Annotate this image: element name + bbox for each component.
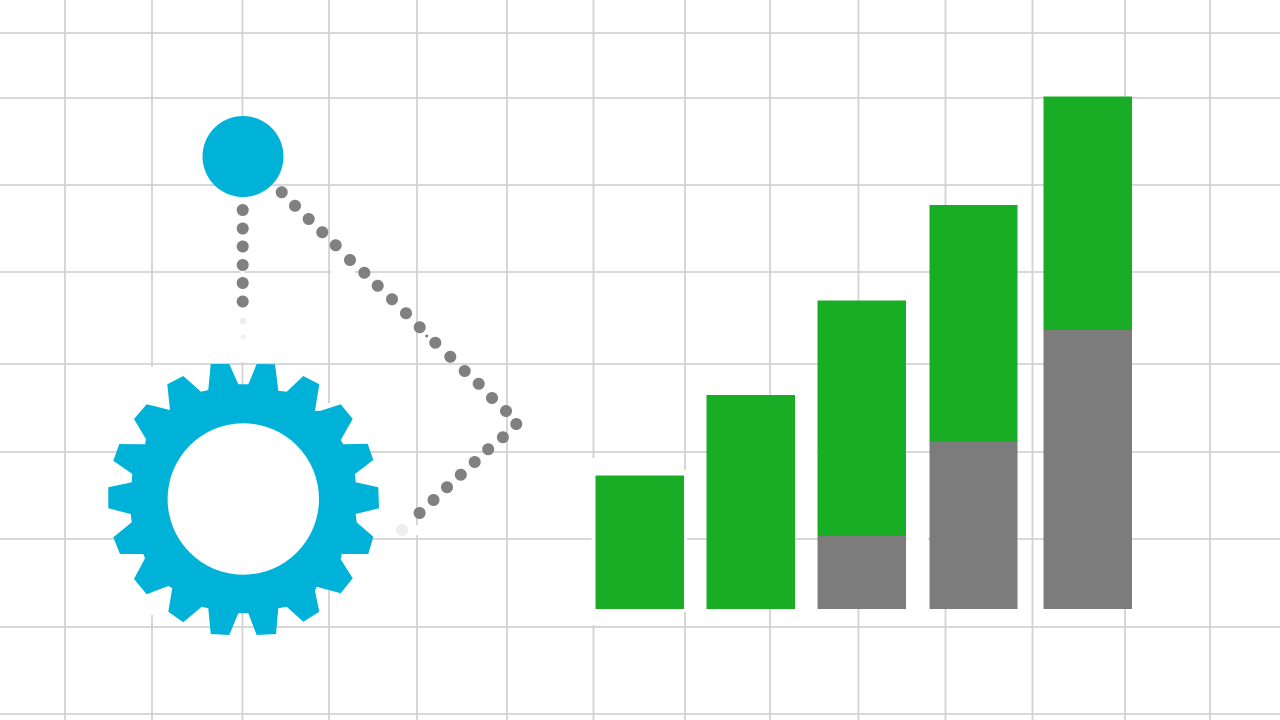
icon: blue gear: [108, 364, 379, 635]
bar 1: [596, 476, 684, 609]
bar 4: [930, 205, 1018, 609]
dotted line: circle diagonally to gear via the elbow: [276, 186, 522, 536]
bar 3: [818, 300, 906, 609]
bar 2: [706, 395, 795, 609]
bar 5: [1044, 96, 1132, 609]
bar chart: rising stacked bars: [596, 96, 1132, 609]
icon: blue circle node: [202, 116, 284, 197]
dotted line: circle down to gear: [237, 204, 249, 340]
